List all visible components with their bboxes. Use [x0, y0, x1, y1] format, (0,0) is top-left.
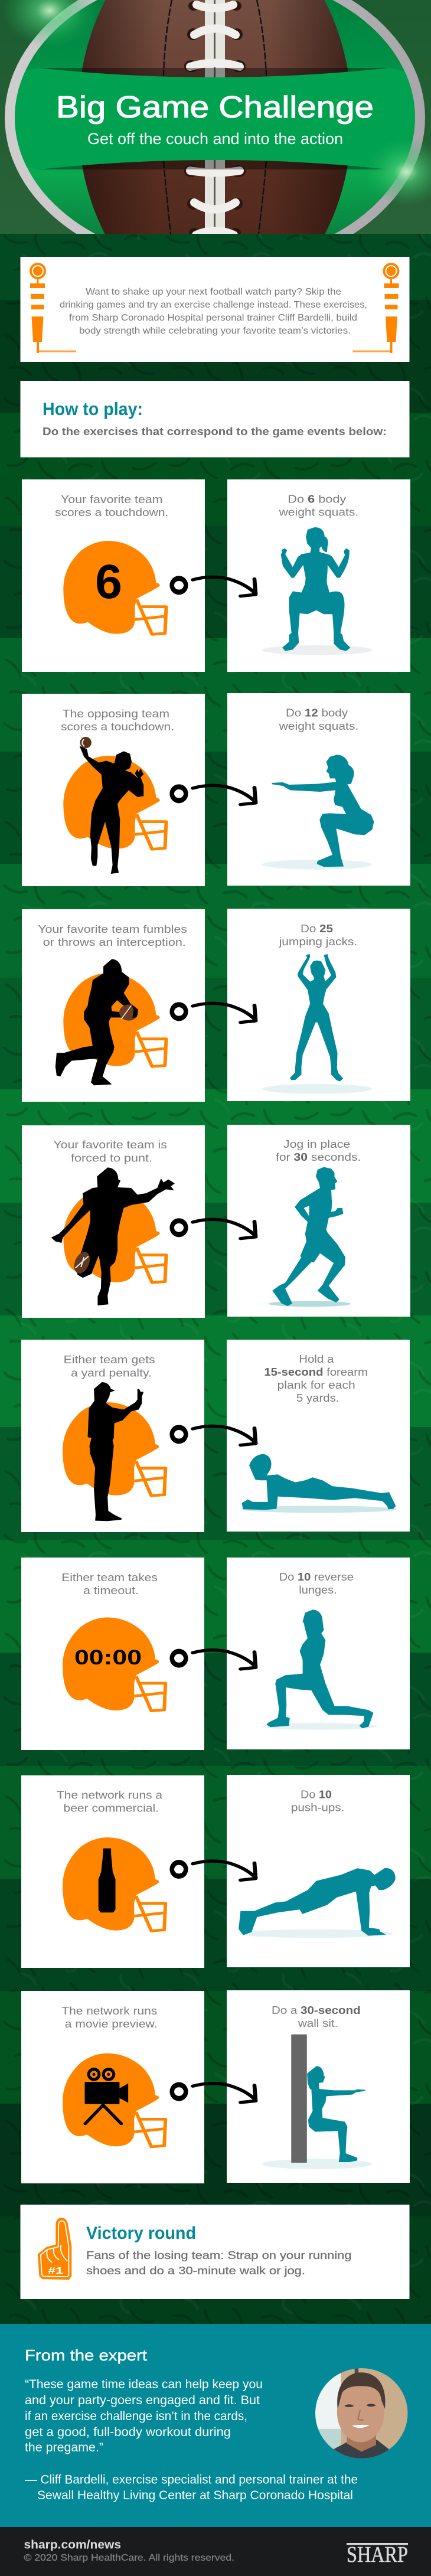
intro text: body strength while celebrating your favorite team’s victories. [79, 326, 351, 336]
card: exercise [227, 1558, 410, 1749]
card: exercise [227, 1125, 410, 1317]
row 4: forced to punt [22, 1125, 410, 1318]
icon: helmet with quarterback [63, 737, 166, 874]
figure: squat side [262, 755, 374, 870]
attribution: Sewall Healthy Living Center at Sharp Coronado Hospital [37, 2489, 353, 2502]
quote: the pregame.” [25, 2441, 103, 2454]
card: exercise: 5 yards. [296, 1392, 339, 1404]
panel: victory round [20, 2205, 410, 2299]
intro text: from Sharp Coronado Hospital personal trainer Cliff Bardelli, build [69, 313, 357, 323]
card: exercise: 15-second forearm [264, 1366, 368, 1378]
row 1: favorite team touchdown [22, 479, 410, 672]
attribution [25, 2473, 358, 2502]
card: exercise [227, 1990, 410, 2183]
panel: how to play [20, 381, 410, 457]
header with football [0, 0, 431, 234]
card: event [22, 1125, 205, 1318]
card: exercise: weight squats. [278, 507, 358, 518]
card: event [21, 1991, 204, 2183]
attribution: — Cliff Bardelli, exercise specialist and personal trainer at the [25, 2473, 358, 2487]
icon: helmet with referee [63, 1382, 165, 1521]
card: exercise: jumping jacks. [278, 936, 357, 948]
card: event: a yard penalty. [71, 1367, 152, 1379]
heading: from the expert: From the expert [25, 2346, 148, 2364]
card: event: Your favorite team fumbles [38, 923, 187, 935]
card: event: Your favorite team is [53, 1139, 167, 1151]
row 2: opposing team touchdown [22, 693, 410, 886]
arrow connector [169, 1002, 256, 1023]
victory text [86, 2249, 352, 2277]
victory text: shoes and do a 30-minute walk or jog. [86, 2265, 305, 2277]
card: event: Your favorite team [61, 494, 163, 505]
figure: squat front [262, 527, 372, 655]
figure: jumping jack [262, 954, 372, 1094]
subtitle: Get off the couch and into the action [87, 130, 343, 148]
card: event: Either team gets [64, 1354, 155, 1366]
intro text: drinking games and try an exercise challenge instead. These exercises, [60, 300, 367, 310]
logo: Sharp: SHARP [347, 2542, 408, 2567]
quote [25, 2378, 263, 2454]
instruction: Do the exercises that correspond to the game events below: [43, 426, 387, 438]
card: event [22, 479, 205, 672]
card: exercise: Jog in place [283, 1138, 350, 1150]
intro text: Want to shake up your next football watch party? Skip the [86, 287, 341, 297]
row 6: timeout [21, 1558, 410, 1750]
quote: “These game time ideas can help keep you [25, 2378, 263, 2391]
figure: jogger [269, 1167, 351, 1307]
row 8: movie preview [21, 1990, 410, 2183]
card: event [21, 1340, 204, 1532]
arrow connector [169, 2082, 256, 2102]
icon: foam finger [38, 2218, 71, 2279]
card: exercise [227, 909, 410, 1101]
arrow connector [169, 1649, 256, 1669]
heading: victory round: Victory round [86, 2224, 196, 2243]
icon: football [15, 0, 415, 234]
card: exercise: plank for each [277, 1379, 355, 1391]
row 7: beer commercial [21, 1775, 410, 1968]
quote: if an exercise challenge isn’t in the cards, [25, 2410, 247, 2423]
icon: helmet with clock: 00:00 [74, 1646, 142, 1669]
card: event: scores a touchdown. [55, 507, 168, 518]
card: exercise: Do 6 body [288, 494, 346, 505]
arrow connector [169, 784, 256, 805]
figure: reverse lunge [262, 1609, 377, 1730]
card: event: Either team takes [61, 1572, 158, 1584]
panel: intro [20, 257, 410, 362]
icon: foam finger: #1 [48, 2266, 63, 2276]
card: exercise: Do 25 [301, 923, 333, 935]
card: exercise: Do 10 [301, 1789, 332, 1801]
icon: helmet with punter [51, 1167, 175, 1305]
arrow connector [169, 1425, 256, 1445]
victory text: Fans of the losing team: Strap on your running [86, 2249, 352, 2261]
card: event: The network runs [61, 2005, 157, 2017]
card: exercise: weight squats. [278, 720, 358, 732]
photo: Cliff Bardelli [314, 2367, 410, 2461]
card: exercise: Do a 30-second [272, 2004, 361, 2016]
card: exercise: Hold a [299, 1353, 334, 1365]
card: event: scores a touchdown. [61, 721, 174, 733]
icon: helmet with 6: 6 [95, 555, 122, 609]
figure: wall sit [262, 2035, 372, 2169]
card: event [22, 909, 205, 1102]
row 3: fumble or interception [22, 909, 410, 1102]
icon: helmet with running back [55, 959, 166, 1085]
card: exercise: for 30 seconds. [276, 1151, 361, 1163]
card: event: The network runs a [57, 1789, 163, 1801]
icon: right goal post marker [353, 264, 399, 353]
title: Big Game Challenge [56, 90, 374, 125]
card: event: beer commercial. [64, 1802, 159, 1814]
card: exercise [227, 1775, 410, 1967]
footer [0, 2527, 431, 2576]
footer link: sharp.com/news [24, 2539, 121, 2552]
icon: helmet with movie camera [63, 2053, 165, 2147]
intro text [60, 287, 367, 336]
card: event [21, 1775, 204, 1968]
quote: get a good, full-body workout during [25, 2425, 231, 2439]
arrow connector [169, 576, 256, 596]
card: event: forced to punt. [71, 1152, 152, 1164]
card: event: or throws an interception. [43, 936, 186, 948]
heading: how to play: How to play: [43, 399, 143, 419]
icon: helmet with beer bottle [63, 1837, 165, 1931]
card: exercise: lunges. [299, 1584, 337, 1596]
copyright: © 2020 Sharp HealthCare. All rights reserved. [24, 2553, 234, 2563]
panel: from the expert [0, 2324, 431, 2527]
card: event [22, 694, 205, 886]
card: exercise [227, 1340, 410, 1532]
card: exercise [227, 479, 410, 672]
figure: push-up [238, 1868, 396, 1938]
card: exercise: wall sit. [298, 2017, 338, 2029]
card: exercise: push-ups. [291, 1802, 344, 1814]
row 5: yard penalty [21, 1340, 410, 1532]
card: event: a movie preview. [65, 2018, 157, 2030]
card: event [21, 1558, 204, 1750]
icon: left goal post marker [30, 264, 76, 353]
card: event: The opposing team [63, 708, 169, 720]
icon: helmet with clock [63, 1617, 165, 1711]
card: exercise: Do 10 reverse [279, 1571, 354, 1583]
quote: and your party-goers engaged and fit. But [25, 2394, 260, 2407]
card: exercise [227, 693, 410, 886]
icon: helmet with 6 [63, 541, 166, 634]
arrow connector [169, 1860, 256, 1880]
arrow connector [169, 1218, 256, 1239]
figure: forearm plank [241, 1454, 396, 1513]
card: event: a timeout. [83, 1585, 139, 1596]
card: exercise: Do 12 body [286, 707, 348, 719]
